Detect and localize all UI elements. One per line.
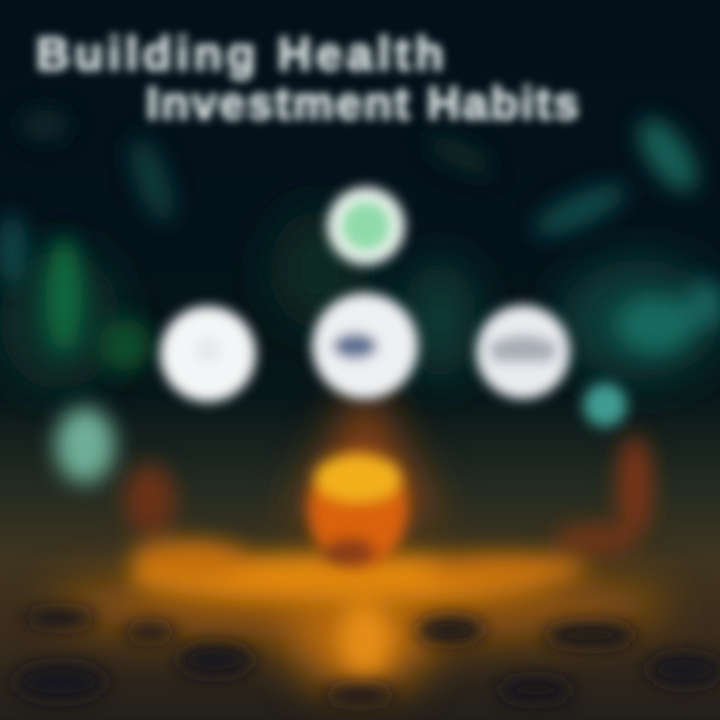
jungle foliage background: [0, 109, 720, 390]
icon: sun / coin: [308, 452, 408, 568]
icon: right white circle: [476, 305, 570, 399]
icon: centre white circle: [312, 293, 418, 399]
icon: small teal circle right: [583, 383, 627, 427]
dark ground patches: [14, 609, 720, 704]
icon: left white circle: [160, 306, 256, 402]
title line 2: Investment Habits: [146, 77, 581, 129]
title line 1: Building Health: [36, 27, 448, 80]
orange ground glow: [14, 380, 720, 704]
icon: pale green glow left: [55, 407, 115, 483]
icon: top green circle: [327, 187, 405, 265]
